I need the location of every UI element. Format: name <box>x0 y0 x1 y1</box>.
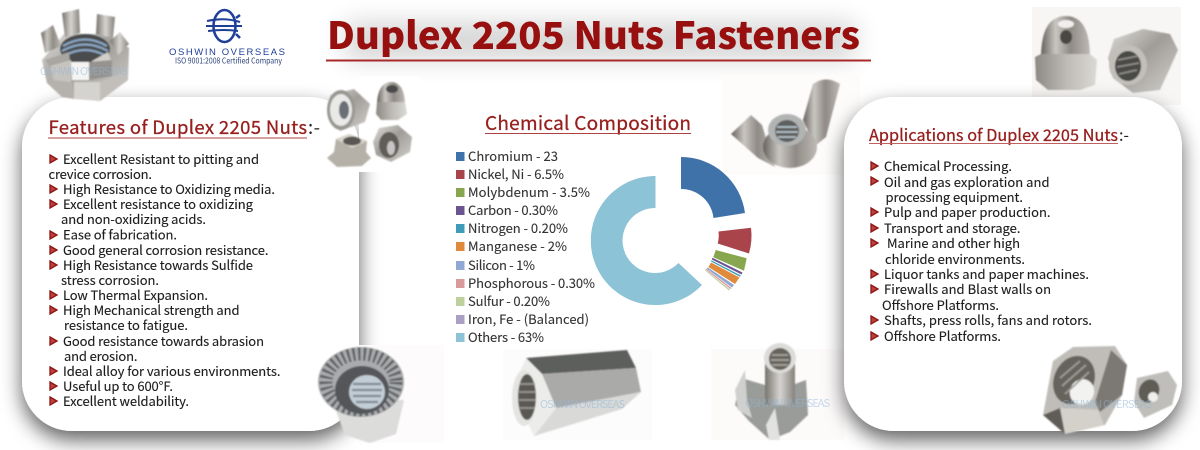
legend: chemical composition: Iron, Fe - (Balanced) <box>468 309 589 328</box>
panel: applications background <box>844 97 1182 431</box>
donut chart: chemical composition <box>591 157 752 305</box>
legend: chemical composition: Carbon - 0.30% <box>468 200 558 219</box>
panel: features list: Good general corrosion resistance. <box>63 240 268 259</box>
legend: chemical composition: Silicon - 1% <box>468 255 535 274</box>
legend: chemical composition: Nitrogen - 0.20% <box>468 218 568 237</box>
image backdrop: flange nut <box>359 345 444 443</box>
panel: features list: Ease of fabrication. <box>63 224 177 244</box>
logo company name: OSHWIN OVERSEAS <box>169 47 285 58</box>
panel: features list: stress corrosion. <box>61 270 159 289</box>
image backdrop: four nuts <box>359 76 419 172</box>
panel: features list: Low Thermal Expansion. <box>63 285 208 304</box>
panel: features list: High Mechanical strength and <box>63 300 240 319</box>
panel: applications list: Liquor tanks and paper machines. <box>884 264 1089 283</box>
panel: applications list: Firewalls and Blast walls on <box>884 279 1051 298</box>
panel: applications list <box>871 156 1092 345</box>
image backdrop: coupling nut <box>503 349 652 440</box>
panel: applications list: processing equipment. <box>886 187 1023 206</box>
legend: chemical composition: Manganese - 2% <box>468 236 567 255</box>
panel: features list: High Resistance to Oxidizing media. <box>63 179 275 198</box>
image backdrop: tee nut <box>711 349 844 440</box>
icon: wing nut <box>731 80 840 168</box>
panel: features list: Ideal alloy for various environments. <box>63 361 280 380</box>
legend: chemical composition <box>456 146 595 346</box>
icon: hex coupling nut <box>512 350 641 436</box>
legend: chemical composition: Molybdenum - 3.5% <box>468 182 590 201</box>
heading: applications: Applications of Duplex 2205 Nuts <box>869 122 1118 146</box>
legend: chemical composition: Phosphorous - 0.30% <box>468 273 595 292</box>
panel: applications list: Transport and storage. <box>884 218 1020 237</box>
watermarks on product photos: OSHWIN OVERSEAS <box>745 395 830 411</box>
title: Duplex 2205 Nuts Fasteners <box>327 5 860 60</box>
panel: applications list: Offshore Platforms. <box>882 295 999 314</box>
icon: logo emblem <box>206 10 242 42</box>
panel: applications list: chloride environments. <box>885 249 1025 268</box>
panel: applications list: Marine and other high <box>887 233 1020 252</box>
icon: serrated flange nut <box>318 347 404 443</box>
legend: chemical composition: Others - 63% <box>468 327 544 346</box>
heading: chemical composition: Chemical Composition <box>485 109 691 136</box>
panel: features list: Good resistance towards abrasion <box>63 331 264 350</box>
legend: chemical composition: Chromium - 23 <box>468 146 558 165</box>
image backdrop: wing nut <box>722 75 860 175</box>
logo: Oshwin Overseas <box>169 10 285 66</box>
panel: features list: and erosion. <box>64 346 138 365</box>
panel: applications list: Chemical Processing. <box>884 156 1012 175</box>
panel: features list: crevice corrosion. <box>48 164 152 183</box>
panel: features list: resistance to fatigue. <box>64 315 188 334</box>
heading: features: Features of Duplex 2205 Nuts <box>48 114 307 140</box>
watermarks on product photos: OSHWIN OVERSEAS <box>1062 396 1152 412</box>
panel: applications list: Oil and gas exploration and <box>884 172 1050 191</box>
legend: chemical composition: Sulfur - 0.20% <box>468 291 550 310</box>
panel: features list: and non-oxidizing acids. <box>61 209 206 228</box>
panel: features list: Excellent resistance to oxidizing <box>63 194 254 213</box>
watermarks on product photos: OSHWIN OVERSEAS <box>540 396 625 412</box>
panel: applications list: Offshore Platforms. <box>884 326 1001 345</box>
icon: dome cap nut and hex view <box>1035 16 1178 93</box>
image backdrop: hex cap nut pair <box>1032 7 1181 105</box>
icon: tee nut <box>735 343 808 440</box>
panel: features background <box>22 97 359 431</box>
legend: chemical composition: Nickel, Ni - 6.5% <box>468 164 564 183</box>
panel: features list: High Resistance towards Sulfide <box>63 255 253 274</box>
panel: features list <box>48 149 280 410</box>
panel: features list: Excellent weldability. <box>63 391 189 410</box>
panel: features list: Excellent Resistant to pitting and <box>63 149 259 168</box>
heading: features: :- <box>308 114 320 140</box>
panel: applications list: Pulp and paper production. <box>884 202 1050 221</box>
icon: castle nut <box>41 9 129 101</box>
title shadow glow <box>345 22 855 60</box>
icon: four assorted nuts <box>327 82 412 167</box>
panel: applications list: Shafts, press rolls, fans and rotors. <box>884 310 1092 329</box>
icon: square nuts <box>1043 346 1177 434</box>
logo certification line: ISO 9001:2008 Certified Company <box>175 56 283 66</box>
heading: applications: :- <box>1119 122 1129 146</box>
panel: features list: Useful up to 600°F. <box>63 376 173 395</box>
watermarks on product photos <box>40 63 1152 412</box>
watermarks on product photos: OSHWIN OVERSEAS <box>40 63 128 79</box>
